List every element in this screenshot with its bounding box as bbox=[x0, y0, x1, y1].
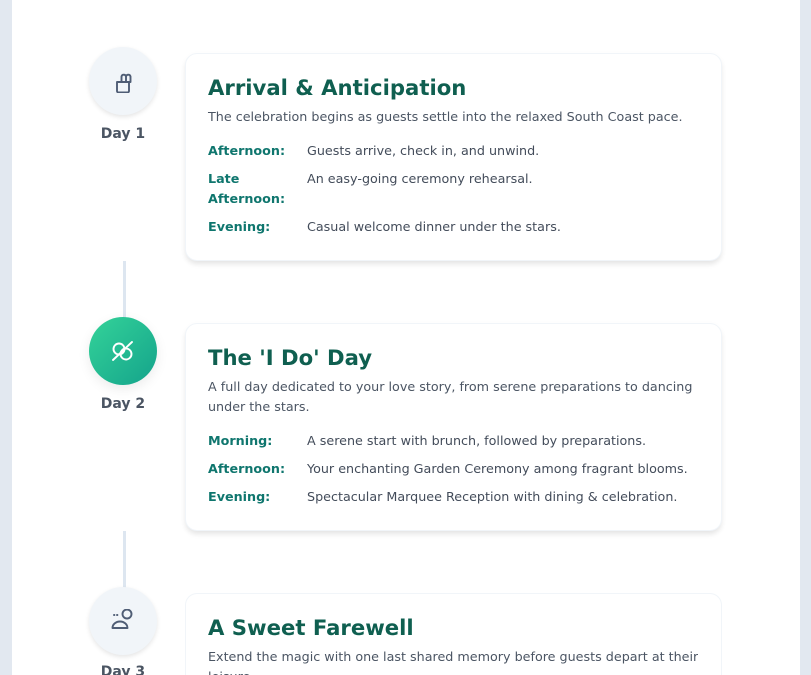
schedule label: evening: Evening: bbox=[208, 489, 270, 504]
text: day 2 description bbox=[208, 379, 692, 414]
label: day 2: Day 2 bbox=[101, 396, 145, 412]
schedule label: late afternoon bbox=[208, 171, 285, 206]
icon: day 3 farewell marker bbox=[89, 587, 157, 655]
icon: day 2 rings marker bbox=[89, 317, 157, 385]
schedule label: morning: Morning: bbox=[208, 433, 272, 448]
heading: day 3: A Sweet Farewell bbox=[208, 615, 414, 640]
text: day 2 description: under the stars. bbox=[208, 399, 310, 414]
text: day 3 description: Extend the magic with one last shared memory before guests depart at their bbox=[208, 649, 698, 664]
schedule text: evening: Casual welcome dinner under the stars. bbox=[307, 219, 561, 234]
schedule label: late afternoon: Afternoon: bbox=[208, 191, 285, 206]
panel: day 2 the I do day bbox=[185, 323, 722, 531]
heading: day 1: Arrival & Anticipation bbox=[208, 75, 466, 100]
icon: day 1 glass marker bbox=[89, 47, 157, 115]
schedule label: afternoon: Afternoon: bbox=[208, 461, 285, 476]
schedule label: afternoon: Afternoon: bbox=[208, 143, 285, 158]
schedule text: evening: Spectacular Marquee Reception with dining & celebration. bbox=[307, 489, 677, 504]
schedule text: late afternoon: An easy-going ceremony rehearsal. bbox=[307, 171, 533, 186]
panel: day 3 farewell bbox=[185, 593, 722, 675]
label: day 1: Day 1 bbox=[101, 126, 145, 142]
schedule label: late afternoon: Late bbox=[208, 171, 239, 186]
connector: day 1 to day 2 bbox=[122, 261, 126, 318]
panel: day 1 arrival bbox=[185, 53, 722, 261]
text: day 3 description bbox=[208, 649, 698, 675]
connector: day 2 to day 3 bbox=[122, 531, 126, 588]
text: day 1 description: The celebration begins as guests settle into the relaxed South Coast pace. bbox=[208, 109, 682, 124]
text: day 2 description: A full day dedicated to your love story, from serene preparations to dancing bbox=[208, 379, 692, 394]
schedule label: evening: Evening: bbox=[208, 219, 270, 234]
heading: day 2: The 'I Do' Day bbox=[208, 345, 372, 370]
schedule text: afternoon: Your enchanting Garden Ceremony among fragrant blooms. bbox=[307, 461, 688, 476]
schedule text: afternoon: Guests arrive, check in, and unwind. bbox=[307, 143, 539, 158]
schedule text: morning: A serene start with brunch, followed by preparations. bbox=[307, 433, 646, 448]
